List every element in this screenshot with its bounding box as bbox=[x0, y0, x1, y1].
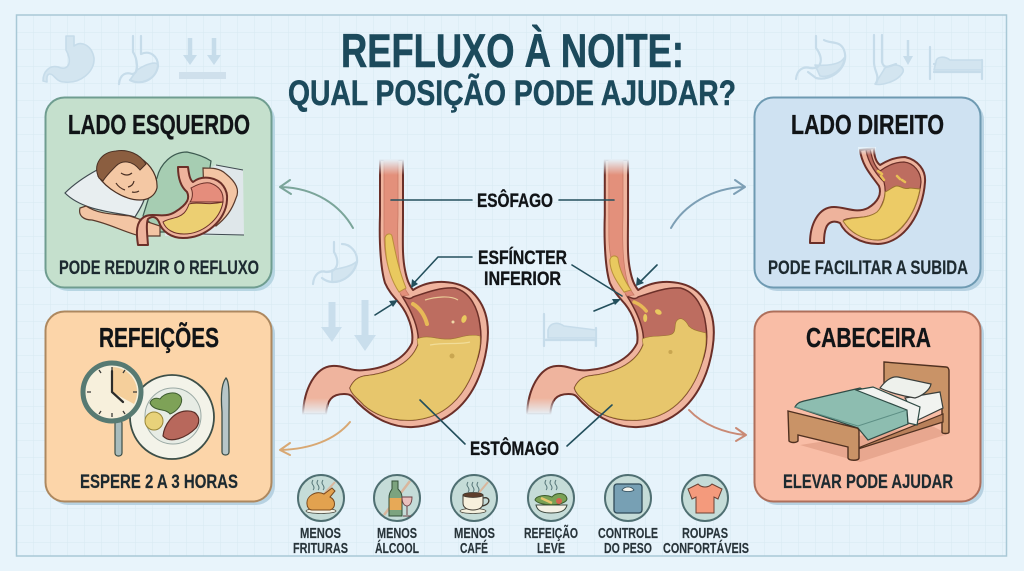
icon: refeição leve bbox=[528, 475, 574, 521]
illustration: sleeping person with stomach bbox=[65, 151, 244, 245]
label: estômago: ESTÔMAGO bbox=[470, 438, 559, 460]
label: esôfago: ESÔFAGO bbox=[477, 190, 553, 212]
panel: cabeceira bbox=[754, 312, 984, 505]
title: REFLUXO À NOITE: bbox=[341, 24, 684, 77]
panel: lado esquerdo bbox=[46, 98, 275, 291]
panel: lado direito bbox=[754, 98, 984, 291]
text: roupas confortáveis: CONFORTÁVEIS bbox=[663, 540, 749, 557]
text: menos frituras: MENOS bbox=[300, 526, 341, 542]
caption: pode facilitar: PODE FACILITAR A SUBIDA bbox=[768, 257, 968, 279]
text: controle do peso bbox=[598, 526, 658, 557]
faint icon: stomach top right bbox=[796, 36, 845, 79]
faint icon: stomach center left bbox=[313, 242, 357, 284]
caption: pode reduzir: PODE REDUZIR O REFLUXO bbox=[59, 257, 259, 279]
text: menos álcool: ÁLCOOL bbox=[375, 540, 419, 557]
label: esfíncter inferior: INFERIOR bbox=[484, 269, 561, 290]
text: menos frituras bbox=[293, 526, 348, 557]
label: esfíncter inferior bbox=[375, 247, 657, 315]
illustration: clock bbox=[83, 363, 141, 456]
text: menos frituras: FRITURAS bbox=[293, 541, 348, 557]
caption: elevar: ELEVAR PODE AJUDAR bbox=[783, 471, 953, 493]
faint icon: bed center bbox=[544, 314, 596, 346]
arrow: to lado direito bbox=[671, 180, 745, 228]
text: menos café: MENOS bbox=[454, 526, 495, 542]
icon: roupas confortáveis bbox=[682, 475, 728, 521]
arrow: to lado esquerdo bbox=[280, 180, 353, 228]
text: refeição leve: LEVE bbox=[537, 541, 565, 557]
faint icon: two arrows down center bbox=[321, 300, 376, 351]
illustration: stomach right side bbox=[810, 147, 925, 244]
text: controle do peso: DO PESO bbox=[604, 541, 652, 557]
illustration: plate bbox=[130, 375, 214, 459]
text: controle do peso: CONTROLE bbox=[598, 526, 658, 542]
label: esfíncter inferior: ESFÍNCTER bbox=[478, 247, 567, 269]
icon: menos café bbox=[451, 475, 497, 521]
text: menos café: CAFÉ bbox=[460, 540, 488, 557]
text: menos álcool bbox=[375, 526, 419, 557]
title bbox=[288, 24, 736, 113]
text: menos álcool: MENOS bbox=[377, 526, 417, 542]
text: refeição leve bbox=[524, 524, 578, 557]
panel: refeições bbox=[46, 312, 275, 505]
heading: refeições: REFEIÇÕES bbox=[99, 322, 219, 353]
diagram: right stomach bbox=[525, 159, 714, 427]
text: roupas confortáveis: ROUPAS bbox=[682, 526, 728, 542]
icon: menos frituras bbox=[298, 475, 344, 521]
heading: lado esquerdo: LADO ESQUERDO bbox=[68, 109, 250, 140]
faint icon: stomach with liquid top left bbox=[119, 36, 158, 84]
faint icon: esophagus and arrow top right bbox=[874, 35, 913, 84]
illustration: knife bbox=[221, 378, 229, 455]
illustration: bed bbox=[788, 362, 949, 462]
faint icon: stomach top left bbox=[43, 36, 94, 82]
text: menos café bbox=[454, 526, 495, 557]
text: refeição leve: REFEIÇÃO bbox=[524, 524, 578, 542]
title: QUAL POSIÇÃO PODE AJUDAR? bbox=[288, 74, 736, 113]
faint icon: bed top right bbox=[930, 47, 982, 79]
faint icon: arrows pressing down bbox=[179, 38, 226, 79]
arrow: to cabeceira bbox=[689, 410, 746, 441]
label: estômago bbox=[420, 400, 612, 460]
heading: lado direito: LADO DIREITO bbox=[791, 109, 944, 140]
icon: menos álcool bbox=[374, 475, 420, 521]
icon: controle do peso bbox=[605, 475, 651, 521]
diagram: left stomach bbox=[301, 159, 488, 427]
caption: espere: ESPERE 2 A 3 HORAS bbox=[80, 471, 238, 493]
heading: cabeceira: CABECEIRA bbox=[806, 322, 931, 353]
arrow: to refeições bbox=[280, 422, 350, 455]
text: roupas confortáveis bbox=[663, 526, 749, 557]
